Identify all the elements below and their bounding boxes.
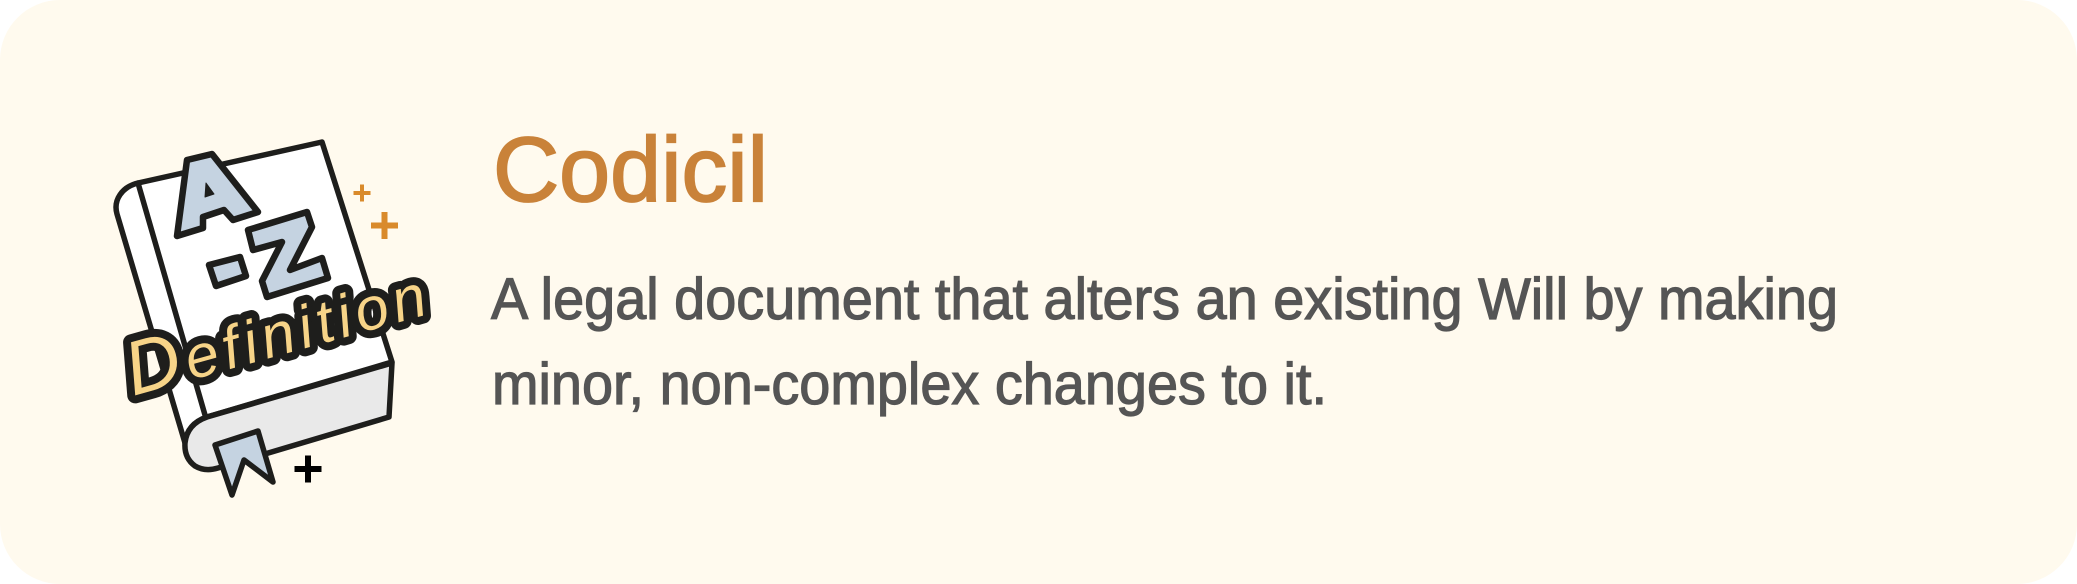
letter A [177,154,258,236]
dash between letters [209,257,246,286]
A counter [205,183,214,197]
body text [491,267,1838,417]
title: Codicil [493,119,768,221]
icon: black plus [294,456,322,482]
letter Z [248,212,328,297]
book page block [116,142,392,443]
icon: definition book [116,142,392,495]
icon: small orange plus [354,184,370,202]
body line 2: minor, non-complex changes to it. [492,352,1327,417]
script word on icon: Definition [115,248,434,412]
body line 1: A legal document that alters an existing Will by making [491,267,1838,332]
icon: large orange plus [371,212,398,239]
bookmark [215,431,273,495]
book bottom pages [185,363,392,470]
book spine line [138,183,205,415]
